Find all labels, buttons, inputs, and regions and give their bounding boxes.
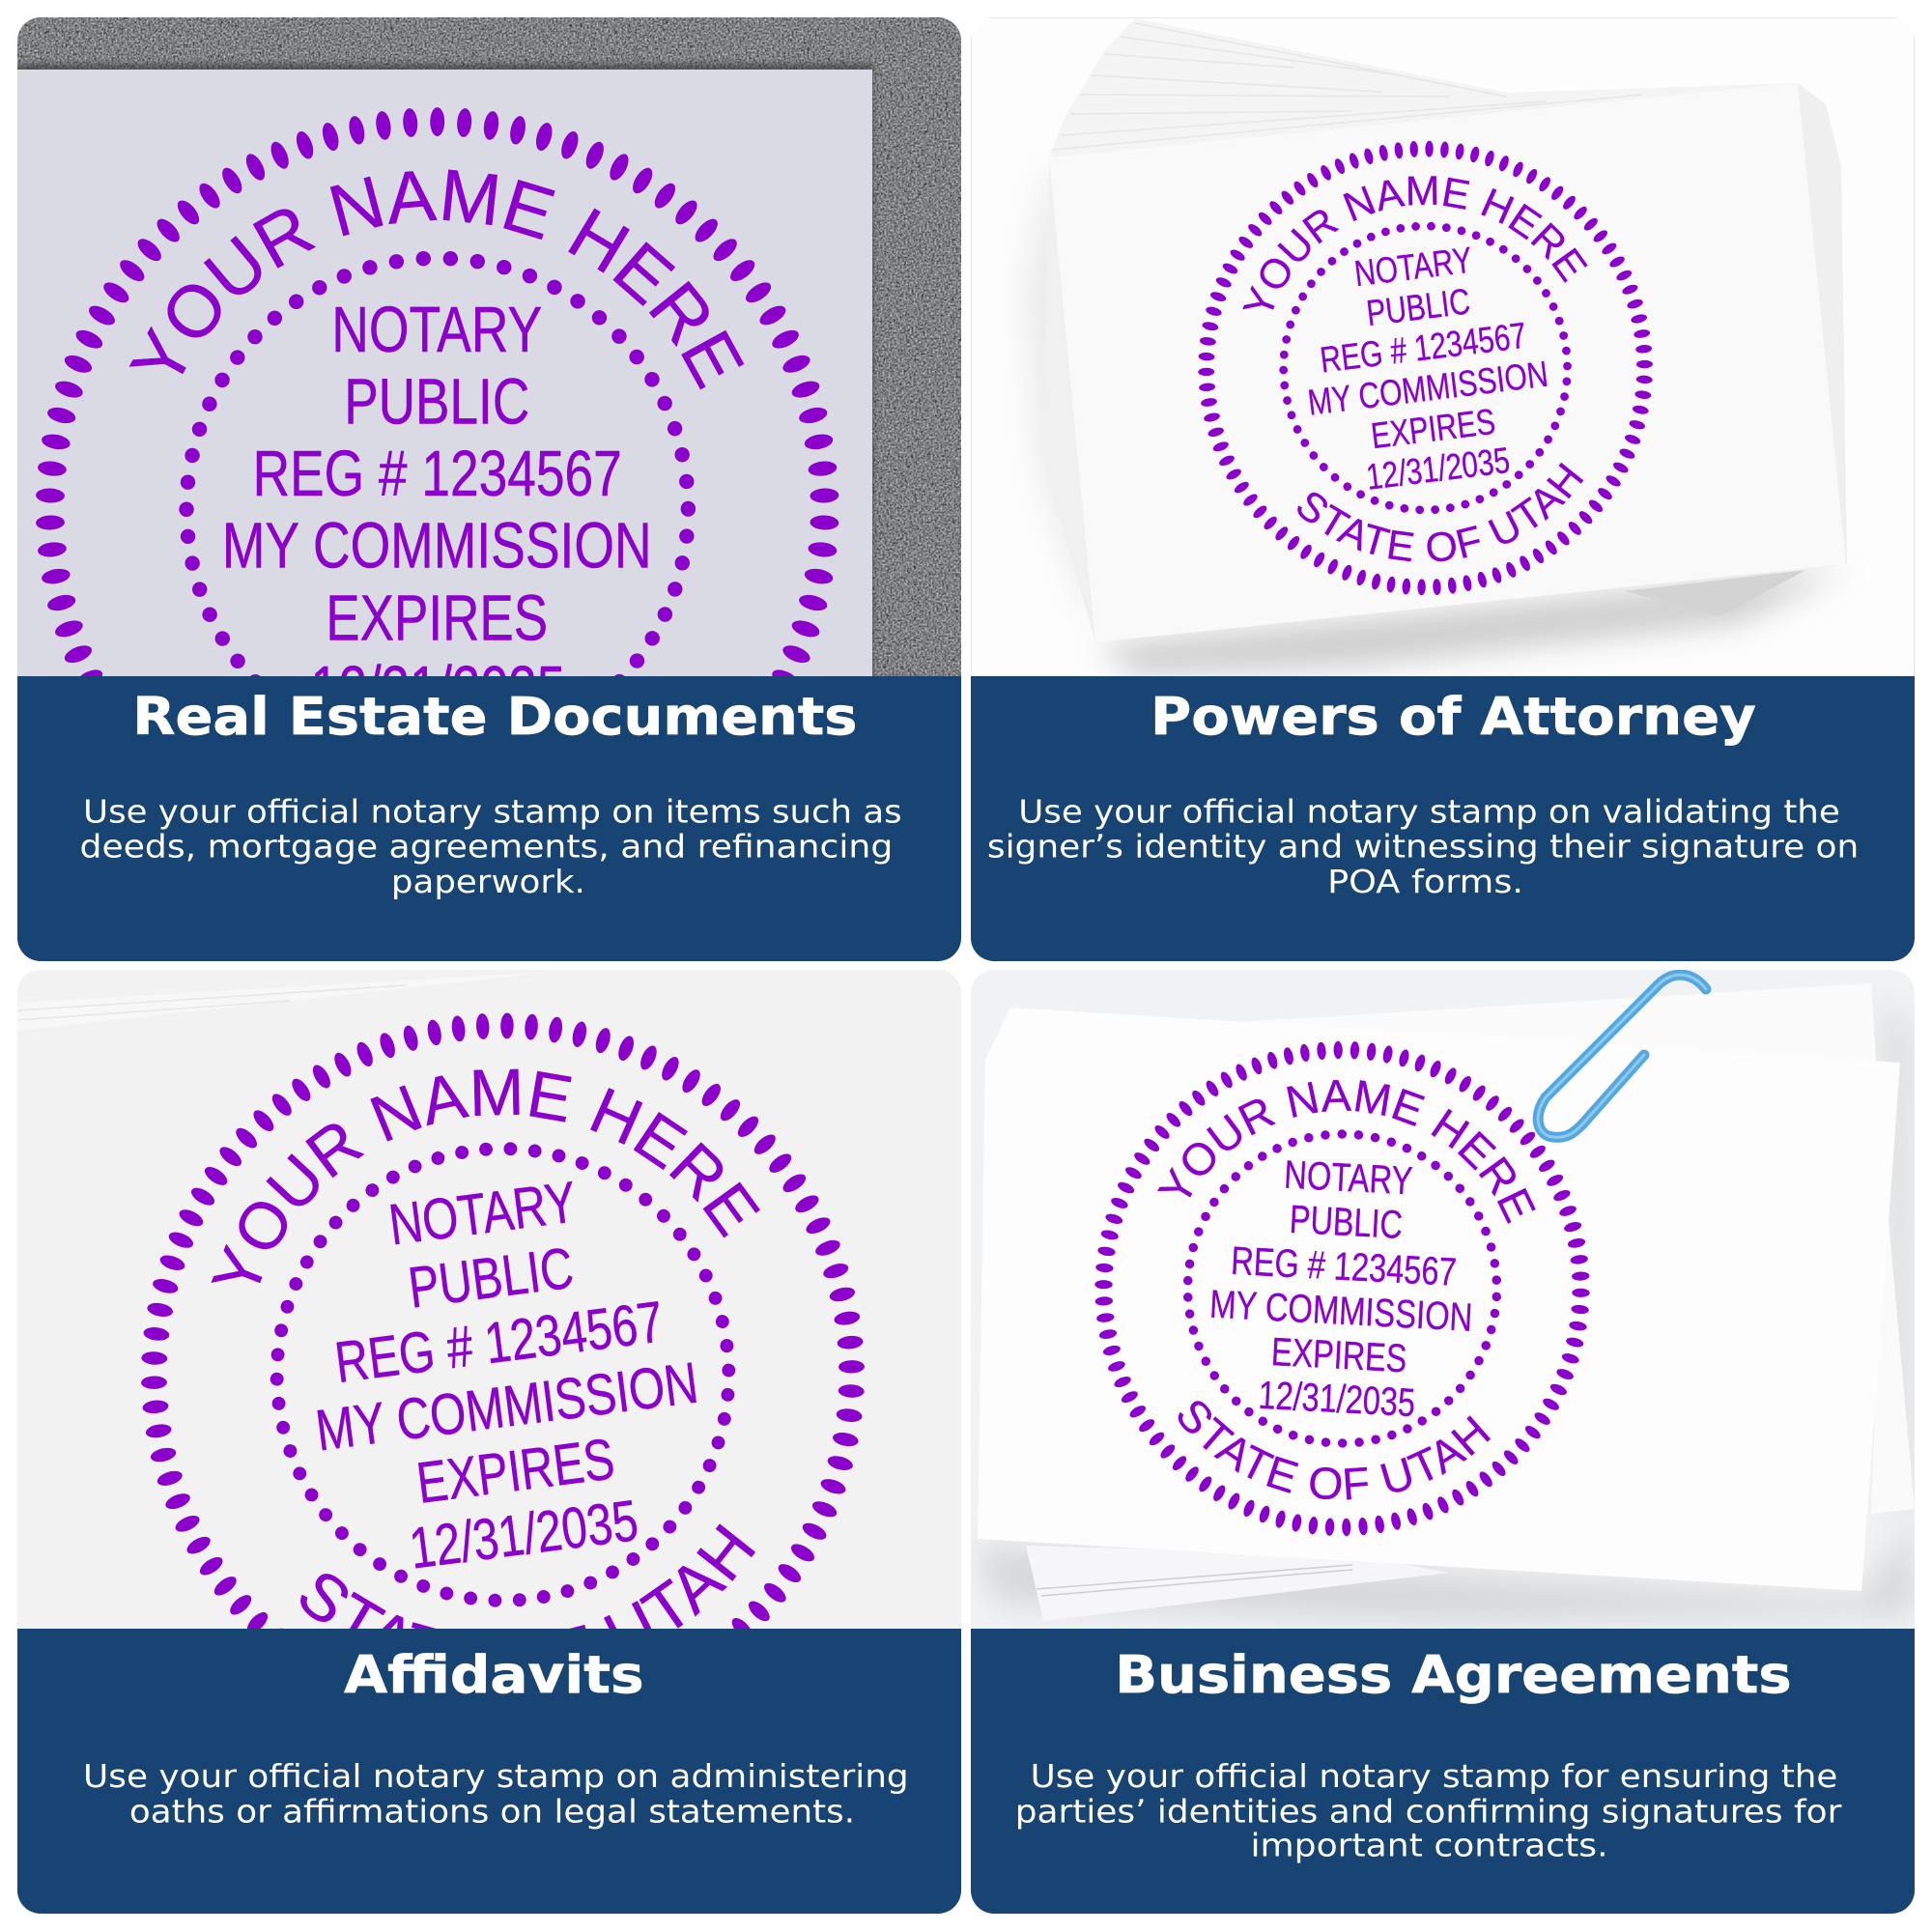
photo: concrete speckles xyxy=(17,17,961,694)
banner xyxy=(17,676,961,961)
stamp text lines xyxy=(1308,247,1548,490)
stamp text lines xyxy=(317,1180,696,1569)
photo: card stack lower right xyxy=(1626,570,1806,598)
panel text xyxy=(1015,1644,1842,1863)
stamp text lines: NOTARY xyxy=(1352,240,1474,294)
stamp text lines: REG # 1234567 xyxy=(1318,315,1528,381)
stamp name arc: YOUR NAME HERE xyxy=(129,170,744,390)
panel: real estate documents xyxy=(17,17,961,961)
description: Use your official notary stamp on validating the xyxy=(1018,794,1840,831)
stamp text lines: MY COMMISSION xyxy=(312,1350,701,1463)
banner xyxy=(971,1629,1915,1914)
description xyxy=(83,1758,909,1830)
icon: blue paper clip xyxy=(1538,975,1706,1137)
photo: paper background xyxy=(17,970,961,1646)
stamp text lines: REG # 1234567 xyxy=(331,1289,667,1395)
description: parties’ identities and confirming signatures for xyxy=(1015,1793,1842,1830)
stamp text lines: EXPIRES xyxy=(326,582,548,654)
stamp text lines: 12/31/2035 xyxy=(1364,440,1512,497)
stamp name arc: YOUR NAME HERE xyxy=(211,1068,760,1283)
photo: card stack left side xyxy=(1049,162,1095,638)
description xyxy=(1015,1758,1842,1863)
stamp: notary seal xyxy=(1198,141,1653,595)
photo: card stack soft shadow xyxy=(1095,570,1846,676)
photo: main sheet xyxy=(978,1008,1900,1591)
stamp state arc: STATE OF UTAH xyxy=(1297,462,1584,562)
panel: powers of attorney xyxy=(971,17,1915,961)
stamp state arc: STATE OF UTAH xyxy=(1179,1401,1492,1500)
heading: Affidavits xyxy=(344,1644,644,1705)
description: Use your official notary stamp on items such as xyxy=(83,794,902,831)
photo: paper sheet xyxy=(17,70,872,688)
description: Use your official notary stamp on administering xyxy=(83,1758,909,1795)
stamp text lines: PUBLIC xyxy=(405,1236,577,1321)
stamp text lines: MY COMMISSION xyxy=(222,511,652,582)
stamp text lines: PUBLIC xyxy=(1364,280,1472,333)
stamp: notary seal xyxy=(141,1012,865,1629)
banner xyxy=(17,1629,961,1914)
description xyxy=(989,798,1857,893)
stamp text lines: NOTARY xyxy=(385,1169,580,1258)
description: paperwork. xyxy=(391,864,585,900)
stamp text lines: EXPIRES xyxy=(1369,401,1497,456)
panel: affidavits xyxy=(17,970,961,1914)
description: signer’s identity and witnessing their signature on xyxy=(987,828,1859,865)
photo: paper shadow xyxy=(17,64,873,682)
stamp text lines: NOTARY xyxy=(1283,1152,1413,1203)
photo: upper back sheet xyxy=(1208,983,1876,1063)
stamp text lines: MY COMMISSION xyxy=(1208,1282,1473,1340)
description xyxy=(80,794,902,900)
description: important contracts. xyxy=(1250,1827,1608,1863)
heading: Powers of Attorney xyxy=(1151,686,1756,747)
stamp text lines xyxy=(226,305,647,676)
photo: sheet shadows xyxy=(978,1005,1915,1623)
description: Use your official notary stamp for ensuring the xyxy=(1031,1758,1837,1795)
panel text xyxy=(80,686,902,900)
banner xyxy=(971,676,1915,961)
photo: card stack right side xyxy=(1798,83,1847,570)
stamp name arc: YOUR NAME HERE xyxy=(1157,1080,1536,1224)
panel: business agreements xyxy=(971,970,1915,1914)
stamp: notary seal xyxy=(1094,1041,1590,1536)
stamp name arc: YOUR NAME HERE xyxy=(1242,176,1588,310)
panel text xyxy=(83,1644,909,1830)
heading: Real Estate Documents xyxy=(132,686,857,747)
photo: background xyxy=(971,17,1915,694)
description: deeds, mortgage agreements, and refinancing xyxy=(80,828,893,865)
stamp text lines: MY COMMISSION xyxy=(1306,354,1550,423)
stamp text lines: EXPIRES xyxy=(413,1426,618,1516)
stamp state arc: STATE OF UTAH xyxy=(300,1523,755,1629)
photo: card stack top xyxy=(1049,18,1798,157)
stamp text lines: PUBLIC xyxy=(1289,1197,1404,1247)
heading: Business Agreements xyxy=(1115,1644,1792,1705)
photo: background xyxy=(971,970,1915,1646)
panel text xyxy=(987,686,1859,900)
stamp text lines: REG # 1234567 xyxy=(1230,1238,1458,1294)
stamp text lines: NOTARY xyxy=(331,295,542,366)
stamp text lines: 12/31/2035 xyxy=(406,1488,641,1581)
description: oaths or affirmations on legal statements. xyxy=(129,1793,855,1830)
stamp text lines: EXPIRES xyxy=(1270,1329,1408,1380)
photo: lower envelope xyxy=(1026,1546,1449,1621)
photo: concrete surface xyxy=(17,17,961,694)
photo: lower right back sheet xyxy=(1871,1159,1915,1514)
stamp text lines xyxy=(1204,1149,1481,1428)
stamp text lines: REG # 1234567 xyxy=(253,439,622,510)
description: POA forms. xyxy=(1327,864,1523,900)
stamp text lines: 12/31/2035 xyxy=(310,654,565,725)
photo: top card xyxy=(1049,83,1846,642)
stamp text lines: 12/31/2035 xyxy=(1258,1373,1416,1425)
stamp: notary seal xyxy=(36,107,838,676)
stamp text lines: PUBLIC xyxy=(344,366,529,438)
photo: left soft shadow xyxy=(1022,193,1078,584)
photo: paper stack corner xyxy=(17,985,406,1020)
